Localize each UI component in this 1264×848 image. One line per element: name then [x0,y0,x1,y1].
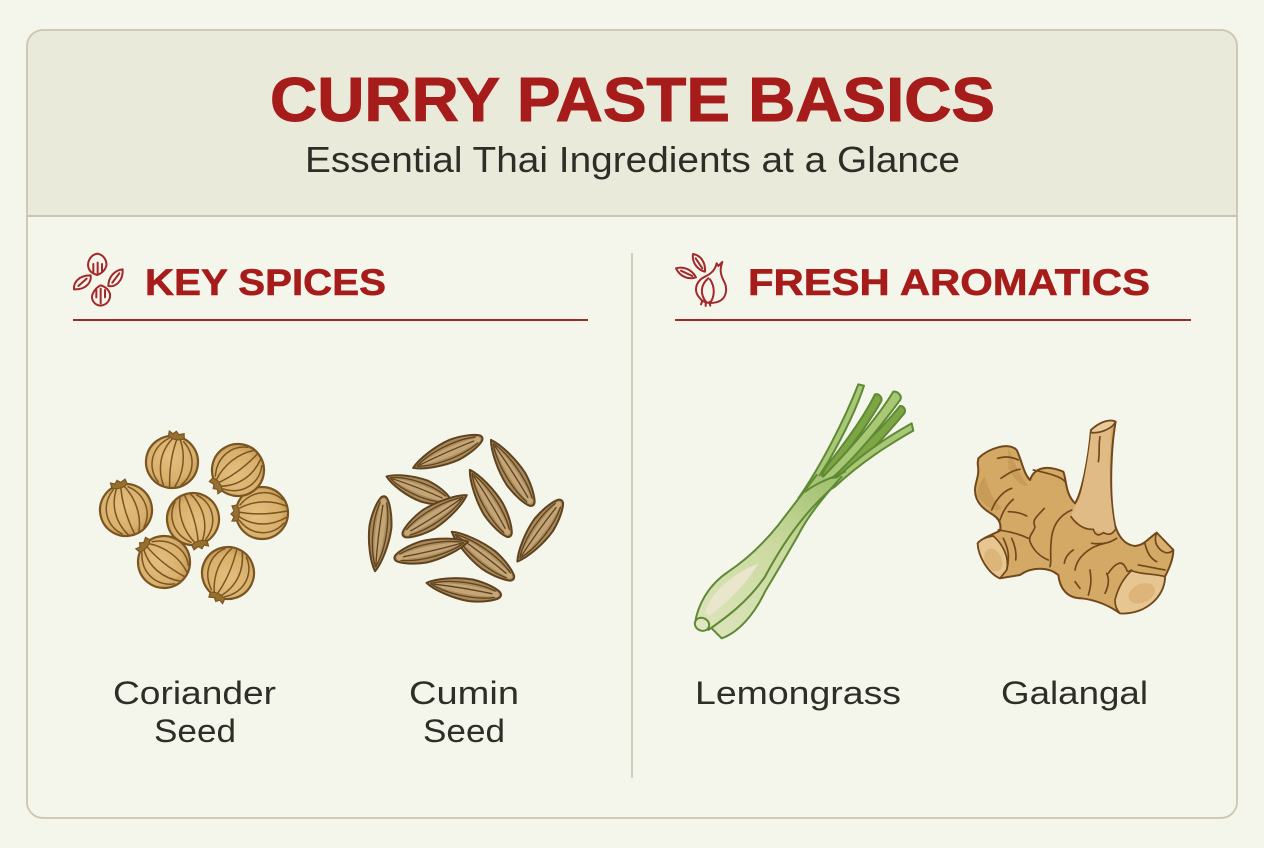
illustration: galangal [975,421,1173,613]
icon: spice seeds [74,254,123,306]
header band [27,30,1237,216]
title: CURRY PASTE BASICS [270,66,995,135]
label: coriander seed: Coriander [113,675,276,711]
label: galangal: Galangal [1001,675,1148,711]
illustration: cumin seeds [364,427,570,606]
illustration: coriander seeds [93,427,288,612]
panel: key spices [73,254,588,749]
subtitle: Essential Thai Ingredients at a Glance [305,139,960,180]
label: lemongrass: Lemongrass [695,675,901,711]
label: cumin seed: Cumin [409,675,519,711]
label: coriander seed: Seed [154,713,236,749]
panel: fresh aromatics [675,254,1191,711]
heading: key spices: KEY SPICES [145,262,386,303]
heading: fresh aromatics: FRESH AROMATICS [748,262,1150,303]
icon: garlic and leaves [676,254,726,306]
label: cumin seed: Seed [423,713,505,749]
illustration: lemongrass [693,384,913,638]
label: coriander seed [113,675,276,749]
label: cumin seed [409,675,519,749]
